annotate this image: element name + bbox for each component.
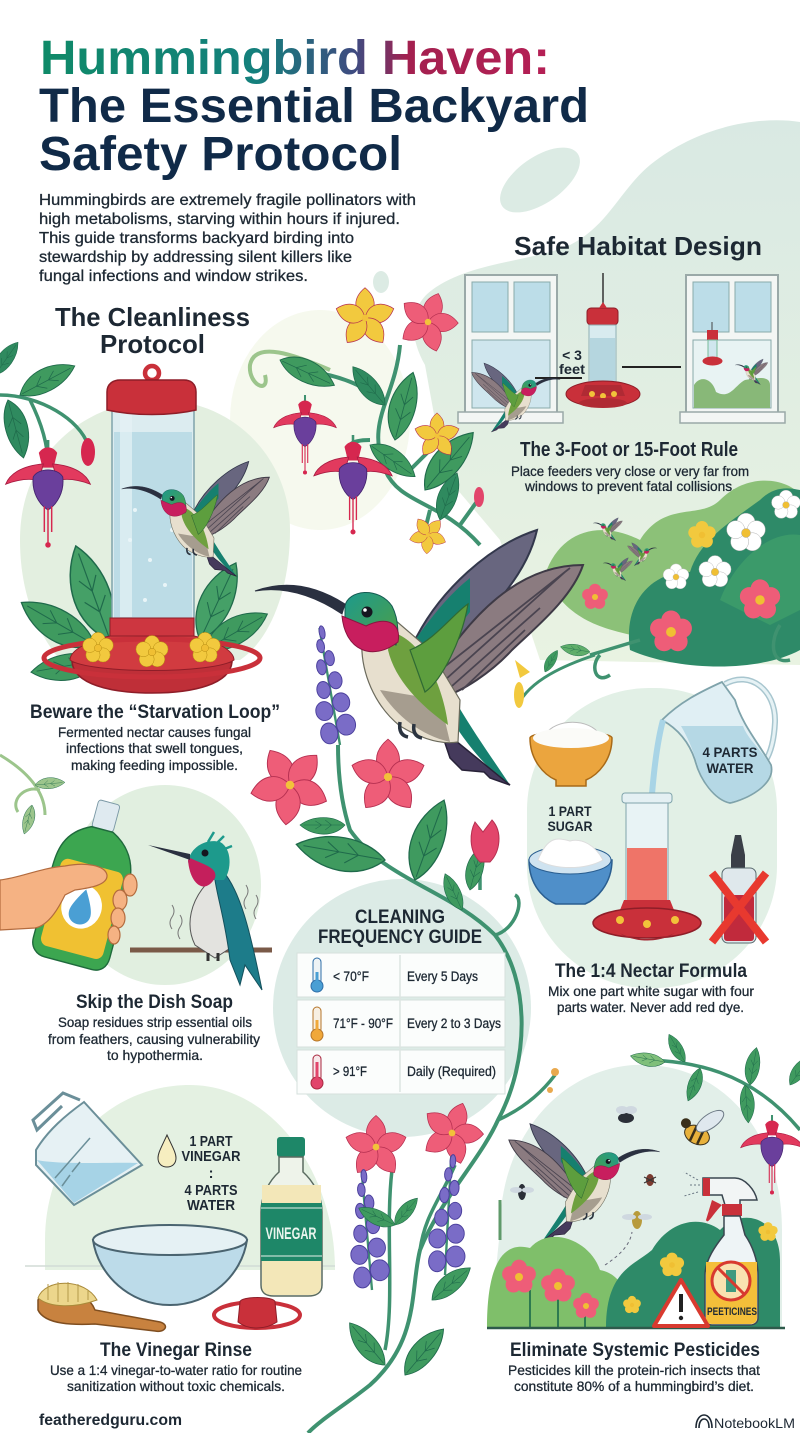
hummingbird — [509, 1124, 660, 1241]
ratio label — [158, 1134, 241, 1214]
window right — [680, 275, 785, 423]
row: cool: < 70°F — [333, 968, 369, 984]
ratio label: : — [209, 1166, 213, 1182]
panel: nectar formula illustration — [529, 679, 775, 943]
heading: the cleanliness protocol: Protocol — [100, 329, 205, 359]
title: Hummingbird Haven: — [40, 32, 550, 85]
row: cool — [311, 958, 478, 992]
text: vinegar rinse: Use a 1:4 vinegar-to-water ratio for routine — [50, 1362, 302, 1378]
text: 3-foot rule: The 3-Foot or 15-Foot Rule — [520, 439, 738, 461]
title — [39, 32, 589, 181]
text: starvation loop: Beware the “Starvation Loop” — [30, 702, 280, 723]
nectar feeder — [593, 793, 701, 940]
ratio label: 4 PARTS — [184, 1183, 238, 1199]
lower flowers and leaves — [341, 1068, 559, 1381]
spray bottle — [684, 1172, 758, 1325]
intro text: Hummingbirds are extremely fragile pollinators with — [39, 192, 416, 209]
feeder in far window — [702, 322, 722, 366]
red dye with cross — [712, 835, 766, 943]
intro text: This guide transforms backyard birding into — [39, 230, 354, 247]
panel: pesticide illustration — [487, 1032, 800, 1328]
text: eliminate pesticides — [508, 1340, 760, 1394]
label: 1 part sugar — [548, 803, 592, 834]
footer: notebooklm badge: NotebookLM — [714, 1415, 795, 1431]
branch with fuchsia — [0, 338, 95, 548]
title: Safety Protocol — [39, 128, 402, 181]
bird far window — [735, 359, 768, 384]
table — [297, 953, 505, 1094]
distance label — [559, 347, 681, 377]
panel: lower central vine with flowers — [234, 623, 559, 1433]
title: The Essential Backyard — [39, 80, 589, 133]
insects — [510, 1095, 730, 1265]
intro text: high metabolisms, starving within hours if injured. — [39, 211, 400, 228]
text: skip the dish soap: Skip the Dish Soap — [76, 992, 233, 1013]
text: 3-foot rule — [511, 439, 749, 494]
text: starvation loop: Fermented nectar causes fungal — [58, 724, 251, 740]
row: hot: > 91°F — [333, 1063, 367, 1079]
orange bowl with sugar — [530, 722, 612, 786]
vinegar bottle — [261, 1137, 322, 1296]
ratio label: WATER — [187, 1198, 235, 1214]
heading: FREQUENCY GUIDE — [318, 927, 482, 948]
footer source: featheredguru.com — [39, 1412, 182, 1429]
row: warm: 71°F - 90°F — [333, 1015, 393, 1031]
row: hot: Daily (Required) — [407, 1064, 496, 1079]
panel: safe habitat windows — [458, 273, 785, 432]
branch and fuchsia — [629, 1032, 800, 1195]
pitcher — [648, 679, 775, 845]
heading — [318, 907, 482, 948]
text: starvation loop: making feeding impossible. — [71, 757, 238, 773]
panel: vinegar rinse illustration — [25, 1093, 335, 1331]
text: vinegar rinse — [50, 1340, 302, 1394]
brush — [38, 1282, 165, 1331]
blue bowl with sugar — [529, 839, 612, 904]
near feeder — [566, 273, 640, 408]
text: nectar formula: The 1:4 Nectar Formula — [555, 961, 747, 982]
text: vinegar rinse: sanitization without toxic chemicals. — [67, 1378, 285, 1394]
panel: upper vine with flowers — [250, 283, 484, 562]
feeder leaves — [13, 540, 273, 686]
window left — [458, 275, 563, 423]
panel: cleaning frequency guide — [297, 907, 505, 1094]
spray bottle: PEETICINES — [707, 1306, 757, 1318]
sprig under hills — [514, 648, 595, 708]
text: 3-foot rule: windows to prevent fatal collisions. — [524, 478, 736, 494]
text: skip the dish soap: from feathers, causing vulnerability — [48, 1031, 260, 1047]
heading: CLEANING — [355, 907, 445, 928]
text: nectar formula: parts water. Never add red dye. — [557, 999, 744, 1015]
soap bottle — [29, 792, 149, 973]
row: cool: Every 5 Days — [407, 969, 478, 984]
vinegar bottle: VINEGAR — [266, 1224, 316, 1243]
warning triangle — [654, 1280, 708, 1326]
text: eliminate pesticides: Pesticides kill the protein-rich insects that — [508, 1362, 760, 1378]
label: 1 part sugar: SUGAR — [548, 818, 592, 834]
text: 3-foot rule: Place feeders very close or very far from — [511, 463, 749, 479]
label: 4 parts water — [702, 744, 758, 776]
text: eliminate pesticides: constitute 80% of a hummingbird’s diet. — [514, 1378, 754, 1394]
distance label: < 3 — [562, 347, 582, 363]
panel: big feeder illustration with fuchsia and leaves — [0, 338, 273, 693]
measuring jug — [33, 1093, 142, 1205]
perch — [130, 948, 272, 952]
label: 4 parts water: 4 PARTS — [702, 744, 758, 760]
text: vinegar rinse: The Vinegar Rinse — [100, 1340, 252, 1361]
text: starvation loop: infections that swell tongues, — [66, 740, 243, 756]
row: hot — [311, 1055, 496, 1089]
ratio label: 1 PART — [190, 1134, 233, 1150]
heading: the cleanliness protocol: The Cleanliness — [55, 302, 250, 332]
ruffled hummingbird — [148, 832, 262, 990]
ratio label: VINEGAR — [182, 1149, 241, 1165]
text: eliminate pesticides: Eliminate Systemic Pesticides — [510, 1340, 760, 1361]
intro text: stewardship by addressing silent killers like — [39, 249, 352, 266]
heading: the cleanliness protocol — [55, 302, 250, 359]
main hummingbird — [255, 530, 583, 785]
text: nectar formula: Mix one part white sugar with four — [548, 983, 754, 999]
heading: safe habitat design: Safe Habitat Design — [514, 231, 762, 261]
text: skip the dish soap — [48, 992, 260, 1063]
row: warm — [311, 1007, 501, 1041]
intro text — [39, 192, 416, 285]
feeder cap — [214, 1298, 300, 1328]
text: skip the dish soap: to hypothermia. — [107, 1047, 203, 1063]
row: warm: Every 2 to 3 Days — [407, 1016, 501, 1031]
distance label: feet — [559, 361, 585, 377]
label: 4 parts water: WATER — [706, 760, 754, 776]
left sprig — [0, 755, 65, 836]
intro text: fungal infections and window strikes. — [39, 268, 308, 285]
bushes and ground — [487, 1200, 785, 1328]
hand — [0, 864, 137, 944]
label: 1 part sugar: 1 PART — [548, 803, 592, 819]
panel: garden hills with flowers and distant birds — [514, 481, 800, 708]
text: skip the dish soap: Soap residues strip essential oils — [58, 1014, 252, 1030]
feeder — [44, 366, 260, 693]
glass bowl — [93, 1225, 247, 1305]
panel: dish soap illustration — [0, 792, 272, 990]
bird near window — [472, 363, 582, 432]
text: nectar formula — [548, 961, 754, 1015]
text: starvation loop — [30, 702, 280, 773]
small hummingbird — [122, 462, 269, 576]
